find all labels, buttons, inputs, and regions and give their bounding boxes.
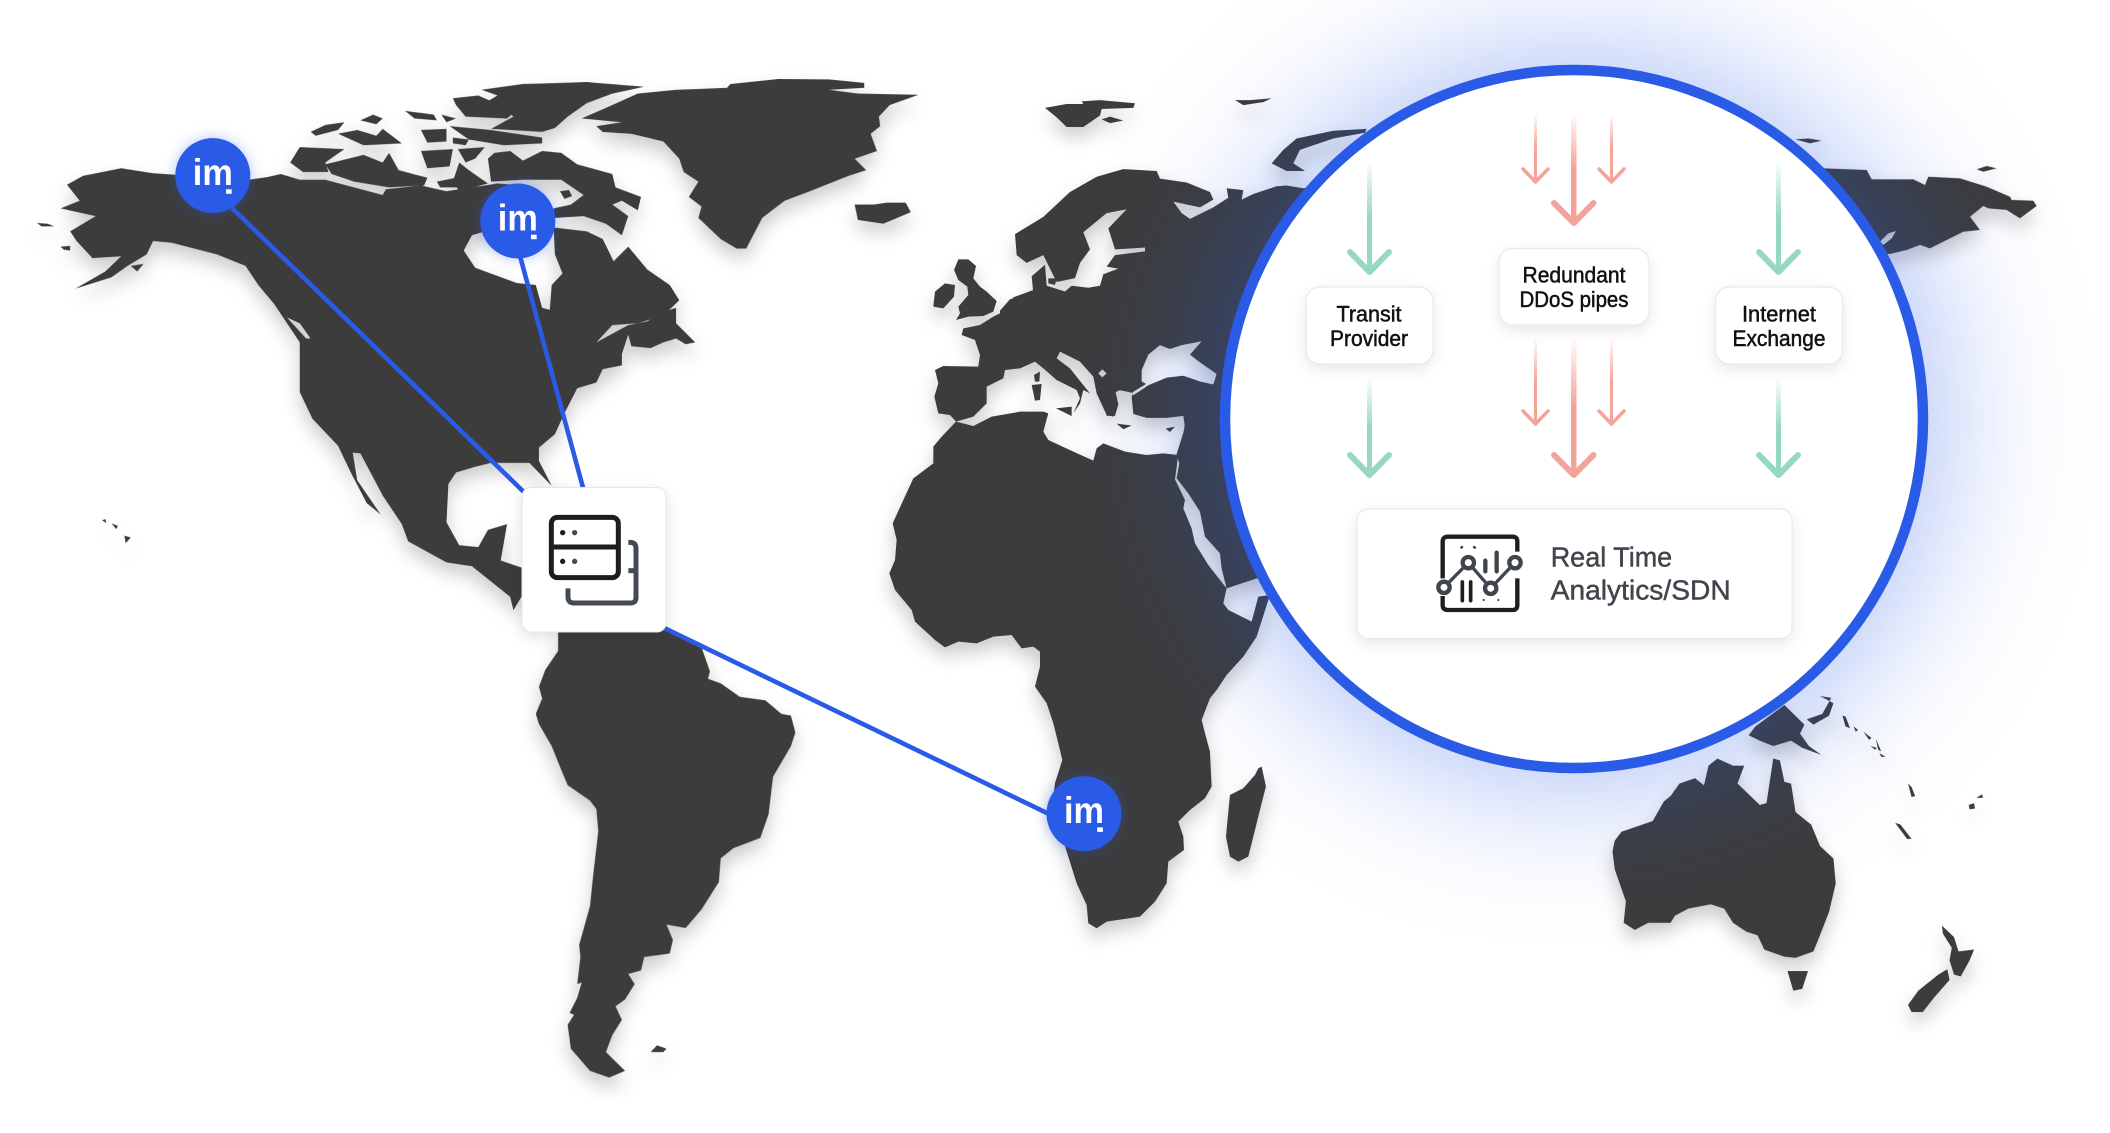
icon: servers: [551, 517, 636, 603]
arrow: internet exchange top: [1759, 163, 1798, 272]
card: internet exchange: [1716, 287, 1842, 364]
pin: hudson bay: [480, 184, 555, 258]
arrow: transit bottom: [1350, 380, 1389, 475]
card: redundant ddos pipes: [1499, 248, 1649, 325]
card: real time analytics: Analytics/SDN: [1551, 574, 1731, 605]
arrows: ddos top: [1523, 115, 1624, 223]
card: redundant ddos pipes: DDoS pipes: [1520, 287, 1628, 312]
icon: analytics chart: [1438, 537, 1521, 610]
card: transit provider: Transit: [1336, 302, 1402, 326]
south america: [536, 627, 795, 1078]
arrows: ddos bottom: [1523, 340, 1624, 475]
pin: hudson bay: im: [498, 197, 538, 238]
pin: southern africa: [1046, 776, 1122, 851]
greenland and iceland: [582, 79, 918, 249]
oceania: [1612, 696, 1983, 1012]
card: real time analytics: Real Time: [1551, 542, 1672, 573]
pin: alaska: [175, 138, 250, 213]
zoom circle with glow: [1225, 70, 1923, 768]
europe west: [933, 259, 1120, 422]
card: internet exchange: Exchange: [1732, 326, 1826, 351]
card: real time analytics: [1357, 509, 1792, 638]
card: transit provider: [1306, 287, 1433, 364]
north america and arctic: [37, 82, 695, 610]
arrow: internet exchange bottom: [1759, 380, 1798, 475]
pin: southern africa: im: [1064, 790, 1104, 831]
pin: alaska: im: [193, 152, 233, 193]
card: transit provider: Provider: [1330, 326, 1408, 351]
arrow: transit top: [1350, 163, 1389, 272]
card: internet exchange: Internet: [1742, 302, 1816, 326]
card: redundant ddos pipes: Redundant: [1522, 262, 1626, 288]
russia far east: [1780, 138, 2037, 254]
server box: [522, 488, 666, 632]
eurasia: [1000, 98, 1367, 464]
connection lines: [232, 208, 1050, 814]
africa and arabia: [889, 390, 1300, 928]
